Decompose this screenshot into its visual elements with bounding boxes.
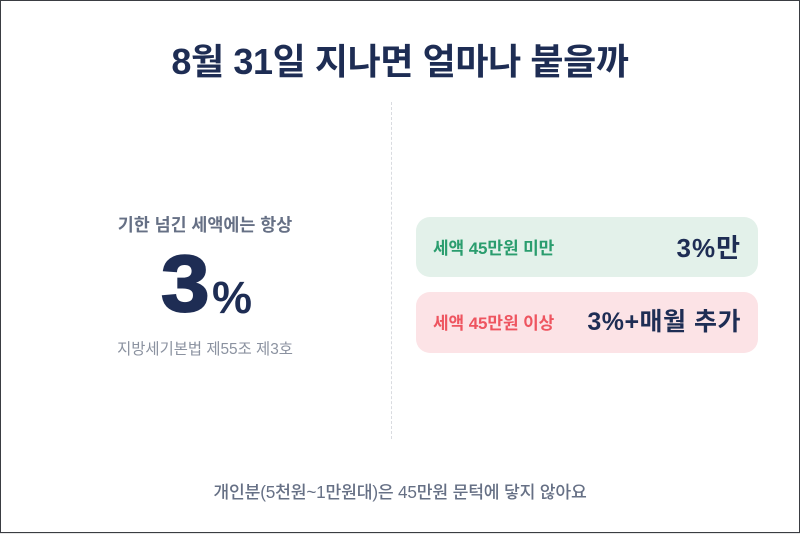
big rate number — [161, 239, 252, 328]
panel: 450,000 won or more — [416, 292, 758, 353]
label: over threshold: 세액 45만원 이상 — [433, 314, 554, 333]
footnote: 개인분(5천원~1만원대)은 45만원 문턱에 닿지 않아요 — [213, 482, 587, 502]
value: 3% plus monthly: 3%+매월 추가 — [587, 308, 741, 336]
title: 8월 31일 지나면 얼마나 붙을까 — [171, 41, 629, 82]
big rate number: % — [212, 272, 252, 323]
value: 3% only: 3%만 — [676, 233, 741, 263]
legal citation: 지방세기본법 제55조 제3호 — [117, 341, 293, 358]
label: under threshold: 세액 45만원 미만 — [433, 239, 554, 258]
panel: left rate summary — [117, 215, 293, 358]
subheading: 기한 넘긴 세액에는 항상 — [118, 215, 292, 235]
panel: under 450,000 won — [416, 217, 758, 277]
big rate number: 3 — [161, 239, 210, 328]
